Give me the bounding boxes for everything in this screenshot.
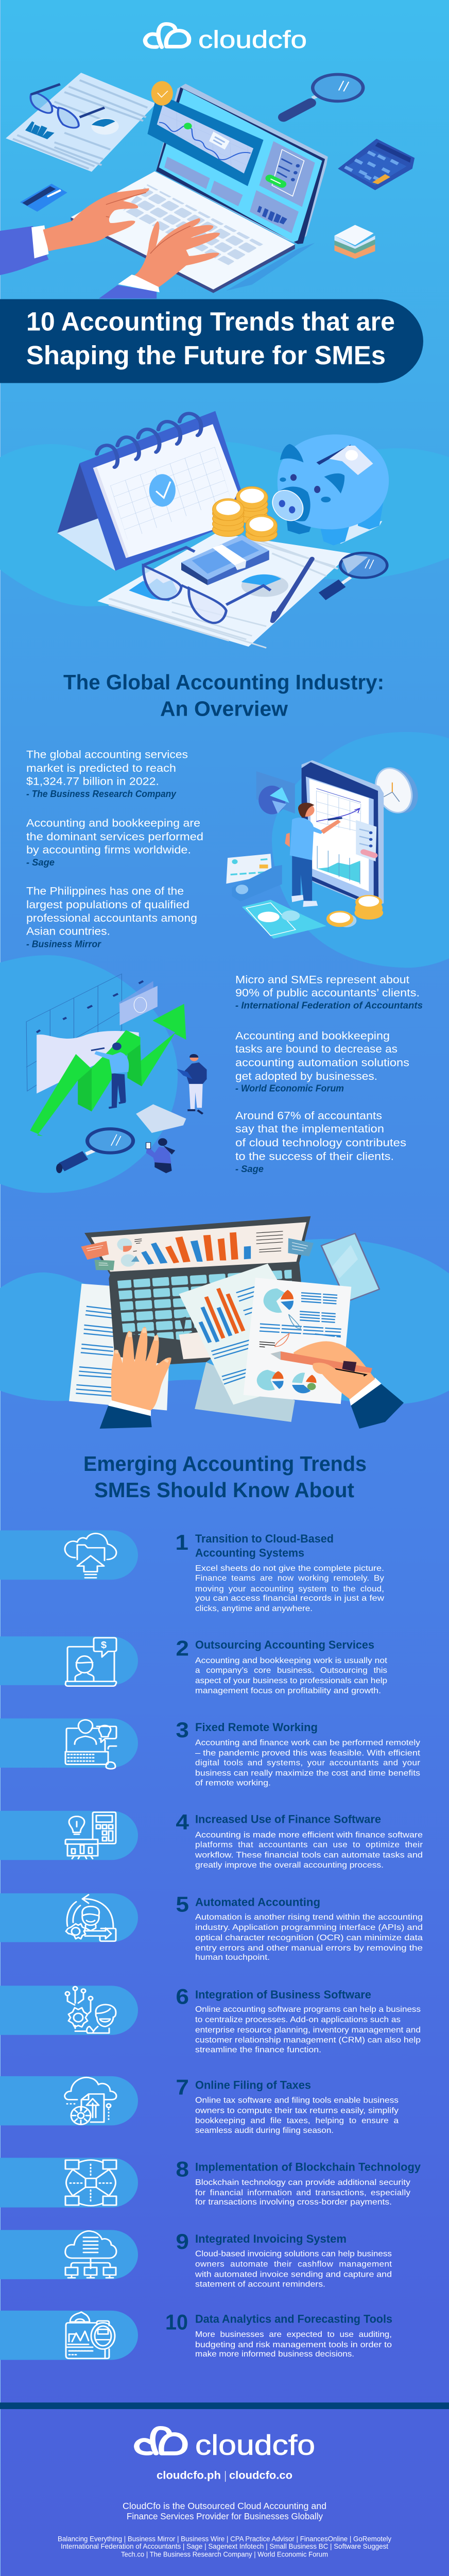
text block: cloud technology: - Sage (235, 1164, 264, 1175)
body text: – the pandemic proved this was feasible. With efficient (195, 1749, 421, 1757)
body text (195, 1831, 423, 1870)
heading: overview (63, 671, 384, 721)
illustration: laptop with reports, top view (69, 1216, 404, 1429)
right hand with pen (271, 1341, 404, 1429)
icon panel: data analytics (0, 2311, 138, 2360)
number: 4 (176, 1810, 189, 1835)
number: 2 (176, 1636, 189, 1660)
body text: Accounting is made more efficient with finance software (195, 1831, 423, 1839)
logo: top (145, 24, 307, 53)
body text: you can access financial records in just a few (195, 1594, 384, 1603)
body text (195, 2330, 392, 2359)
icon: note paper stack (335, 225, 375, 259)
text block: dominant services: by accounting firms worldwide. (26, 843, 191, 856)
banner shape (0, 299, 423, 383)
trend 4 (0, 1810, 423, 1870)
heading: overview: An Overview (160, 698, 288, 721)
number: 6 (176, 1985, 189, 2009)
body text: with automated invoice sending and capture and (195, 2270, 392, 2279)
company description: Finance Services Provider for Businesses Globally (127, 2512, 323, 2521)
icon panel: cloud upload (0, 1531, 138, 1580)
text block: Philippines (26, 885, 197, 950)
text block: market stat: The global accounting services (26, 749, 188, 760)
body text: platforms that accountants can use to optimize their (195, 1840, 423, 1850)
text block: market stat: - The Business Research Company (26, 789, 177, 800)
icon: piggy bank (267, 434, 389, 546)
text block: Philippines: Asian countries. (26, 925, 110, 937)
icon panel: blockchain (0, 2158, 138, 2208)
title banner (0, 299, 423, 383)
text block: Philippines: The Philippines has one of the (26, 885, 184, 897)
icon: report with bars (179, 1264, 332, 1405)
body text: workflow. These financial tools can automate tasks and (195, 1851, 423, 1860)
body text (195, 2005, 421, 2054)
body text: for financial information and transactions, especially (195, 2189, 411, 2197)
heading: Integrated Invoicing System (195, 2232, 347, 2245)
body text: for transactions involving cross-border payments. (195, 2198, 392, 2207)
icon: check badge (151, 81, 173, 106)
text block: dominant services: Accounting and bookkeeping are (26, 817, 200, 829)
icon: credit card and wallet (226, 854, 282, 902)
icon panel: automation (0, 1893, 138, 1942)
text block: automation (235, 1030, 409, 1094)
body text: of remote working. (195, 1778, 271, 1787)
background blob: left of overview (0, 955, 178, 1193)
text block: automation: get adopted by businesses. (235, 1070, 377, 1082)
body text: human touchpoint. (195, 1953, 270, 1962)
text block: dominant services: the dominant services performed (26, 831, 203, 843)
text block: automation: tasks are bound to decrease as (235, 1043, 398, 1055)
title text: Shaping the Future for SMEs (26, 341, 386, 370)
text block: dominant services (26, 817, 203, 868)
company description: CloudCfo is the Outsourced Cloud Accounting and (123, 2501, 326, 2511)
body text: to centralize processes. Add-on applications such as (195, 2015, 401, 2024)
icon: pie chart panel (256, 771, 295, 815)
title text (26, 308, 395, 370)
icon: person drawing (285, 803, 342, 907)
footer (58, 2428, 392, 2558)
text block: market stat: $1,324.77 billion in 2022. (26, 775, 159, 787)
text block: automation: accounting automation solutions (235, 1056, 409, 1069)
text block: SME clients (235, 973, 423, 1011)
text block: Philippines: professional accountants among (26, 912, 197, 924)
icon: wall clock (370, 765, 424, 817)
body text: clicks, anytime and anywhere. (195, 1604, 313, 1613)
trend 10 (0, 2310, 392, 2360)
sources: Tech.co | The Business Research Company | World Economic Forum (121, 2551, 328, 2558)
person with phone (146, 1138, 175, 1173)
heading: Accounting Systems (195, 1546, 304, 1559)
number: 8 (176, 2157, 189, 2181)
icon panel: remote work station (0, 1718, 138, 1769)
icon: money bundle (181, 535, 269, 585)
heading: Implementation of Blockchain Technology (195, 2161, 421, 2173)
body text: business can really maximize the cost and time benefits (195, 1769, 420, 1777)
trend 3 (0, 1718, 421, 1787)
sticky notes (81, 1238, 314, 1270)
illustration: person at phone chart (226, 760, 424, 939)
sources: Balancing Everything | Business Mirror | Business Wire | CPA Practice Advisor | FinancesOnline | GoRemotely (58, 2535, 392, 2543)
heading: emerging trends: Emerging Accounting Trends (83, 1452, 367, 1476)
trend 6 (0, 1985, 421, 2054)
icon: cloud mark (145, 24, 189, 47)
heading: Increased Use of Finance Software (195, 1812, 381, 1825)
text block: market stat (26, 749, 188, 800)
heading: emerging trends (83, 1452, 367, 1502)
icon: grey paper (195, 1362, 295, 1422)
number: 3 (176, 1718, 189, 1742)
heading: Online Filing of Taxes (195, 2078, 311, 2091)
illustration: calendar, coins, piggy bank (57, 411, 389, 648)
heading: overview: The Global Accounting Industry: (63, 671, 384, 694)
body text (195, 1913, 423, 1962)
body text: entry errors and other manual errors by removing the (195, 1944, 423, 1953)
text block: Philippines: largest populations of qualified (26, 899, 189, 911)
website links: cloudcfo.ph (157, 2469, 221, 2481)
body text: streamline the finance function. (195, 2045, 321, 2054)
icon: credit card (136, 1104, 186, 1133)
icon: calculator (338, 139, 415, 190)
text block: cloud technology (235, 1109, 406, 1175)
heading: Outsourcing Accounting Services (195, 1638, 374, 1651)
laptop (71, 84, 328, 293)
body text: owners automate their cashflow management (195, 2260, 392, 2268)
chart backboard (26, 974, 143, 1091)
number: 5 (176, 1892, 189, 1917)
icon: report document (6, 73, 156, 172)
background wave: overview illustration (0, 442, 449, 606)
icon: dollar card (119, 981, 158, 1025)
wordmark: cloudcfo (198, 26, 307, 53)
heading: Integration of Business Software (195, 1988, 371, 2001)
icon panel: business software integration (0, 1986, 138, 2035)
icon: magnifier (322, 553, 387, 597)
heading: Automated Accounting (195, 1896, 320, 1908)
trend 5 (0, 1892, 423, 1962)
icon panel: remote accountant (0, 1636, 138, 1686)
text block: SME clients: - International Federation of Accountants (235, 1001, 423, 1011)
icon: stacked coins (213, 486, 277, 541)
sources: International Federation of Accountants | Sage | Sagenext Infotech | Small Business BC | Software Suggest (61, 2543, 388, 2551)
heading: Data Analytics and Forecasting Tools (195, 2313, 392, 2325)
body text: owners to compute their tax returns easily, simplify (195, 2106, 399, 2115)
heading: Transition to Cloud-Based (195, 1532, 334, 1545)
body text: optical character recognition (OCR) can minimize data (195, 1934, 423, 1942)
left hand (100, 1327, 171, 1429)
body text: aspect of your business to professionals can help (195, 1676, 387, 1685)
body text: Automation is another rising trend within the accounting (195, 1913, 423, 1922)
body text (195, 2178, 411, 2207)
body text (195, 2249, 392, 2289)
body text: enterprise resource planning, inventory management and (195, 2026, 421, 2035)
body text: customer relationship management (CRM) can also help (195, 2036, 421, 2044)
icon: banknotes (242, 900, 326, 939)
body text: a company’s core business. Outsourcing this (195, 1666, 387, 1675)
body text: statement of account reminders. (195, 2280, 325, 2289)
text block: automation: Accounting and bookkeeping (235, 1030, 390, 1042)
icon: cloud mark (136, 2428, 185, 2453)
icon: report with pies (244, 1278, 351, 1404)
website links: cloudcfo.co (229, 2469, 292, 2481)
text block: cloud technology: Around 67% of accountants (235, 1109, 382, 1122)
company description (123, 2501, 326, 2521)
background blob: right of overview (272, 732, 449, 968)
person with laptop (177, 1054, 207, 1114)
icon: left paper (69, 1284, 172, 1411)
body text: More businesses are expected to use auditing, (195, 2330, 392, 2339)
icon: credit card (20, 184, 67, 212)
body text (195, 1564, 385, 1613)
hands typing (0, 188, 220, 298)
heading: emerging trends: SMEs Should Know About (94, 1479, 354, 1502)
body text: Accounting and bookkeeping work is usually not (195, 1656, 388, 1665)
icon panel: online tax filing (0, 2076, 138, 2125)
chart window on screen (147, 93, 264, 186)
body text: management focus on profitability and growth. (195, 1686, 381, 1695)
body text: budgeting and risk management tools in order to (195, 2341, 392, 2349)
trend 9 (0, 2230, 392, 2289)
body text: Finance teams are now working remotely. By (195, 1574, 385, 1583)
body text: greatly improve the overall accounting process. (195, 1861, 384, 1870)
icon: laptop (84, 1216, 310, 1365)
logo: footer (136, 2428, 315, 2461)
sources (58, 2535, 392, 2558)
illustration: laptop with hands and desk items (0, 73, 415, 298)
body text: Online tax software and filing tools enable business (195, 2096, 399, 2105)
wordmark: cloudcfo (195, 2430, 315, 2461)
icon: magnifying glass (284, 74, 363, 117)
number: 1 (175, 1531, 188, 1554)
text block: cloud technology: say that the implementation (235, 1123, 384, 1135)
text block: dominant services: - Sage (26, 858, 55, 868)
text block: market stat: market is predicted to reach (26, 762, 176, 774)
website links (157, 2469, 292, 2482)
heading: Fixed Remote Working (195, 1721, 318, 1734)
text block: cloud technology: of cloud technology contributes (235, 1137, 406, 1149)
dollar sign: $ (101, 1640, 107, 1651)
icon panel: finance software (0, 1811, 138, 1860)
icon: ledger document (97, 533, 351, 648)
body text: industry. Application programming interface (APIs) and (195, 1923, 423, 1932)
body text: seamless audit during filing season. (195, 2126, 334, 2135)
text block: SME clients: Micro and SMEs represent about (235, 973, 409, 986)
text block: Philippines: - Business Mirror (26, 939, 101, 950)
body text: bookkeeping and file taxes, helping to ensure a (195, 2116, 399, 2125)
number: 7 (176, 2075, 189, 2099)
body text: moving your accounting system to the cloud, (195, 1584, 384, 1594)
number: 10 (165, 2310, 188, 2334)
body text: Online accounting software programs can help a business (195, 2005, 421, 2014)
icon: desk calendar (57, 411, 244, 571)
person at chart (91, 1043, 129, 1108)
icon panel: invoicing network (0, 2230, 138, 2279)
wave area (37, 1031, 139, 1093)
text block: cloud technology: to the success of their clients. (235, 1150, 394, 1162)
body text (195, 1738, 421, 1787)
body text: Excel sheets do not give the complete picture. (195, 1564, 384, 1573)
body text (195, 1656, 388, 1695)
trend 1 (0, 1531, 385, 1613)
body text: digital tools and systems, your accountants and your (195, 1758, 421, 1767)
icon: magnifier (56, 1129, 133, 1173)
body text (195, 2096, 399, 2135)
icon: glasses (143, 547, 271, 623)
number: 9 (176, 2230, 189, 2253)
trend 2 (0, 1636, 388, 1695)
heading (195, 1532, 334, 1559)
trend 8 (0, 2157, 421, 2208)
illustration: growth chart with team (26, 974, 207, 1136)
icon: smartphone (321, 1233, 379, 1301)
icon: glasses (30, 84, 105, 128)
body text: make more informed business decisions. (195, 2350, 354, 2359)
text block: SME clients: 90% of public accountants’ clients. (235, 987, 420, 999)
icon: giant phone (302, 760, 384, 907)
title text: 10 Accounting Trends that are (26, 308, 395, 336)
icon: pen (272, 559, 312, 621)
trend 7 (0, 2075, 399, 2135)
background wave: emerging trends illustration (0, 1239, 449, 1404)
body text: Cloud-based invoicing solutions can help business (195, 2249, 392, 2258)
body text: Accounting and finance work can be performed remotely (195, 1738, 421, 1747)
icon: green growth arrow (30, 1004, 186, 1136)
body text: Blockchain technology can provide additional security (195, 2178, 411, 2187)
text block: automation: - World Economic Forum (235, 1083, 344, 1094)
icon: coins (326, 895, 383, 927)
